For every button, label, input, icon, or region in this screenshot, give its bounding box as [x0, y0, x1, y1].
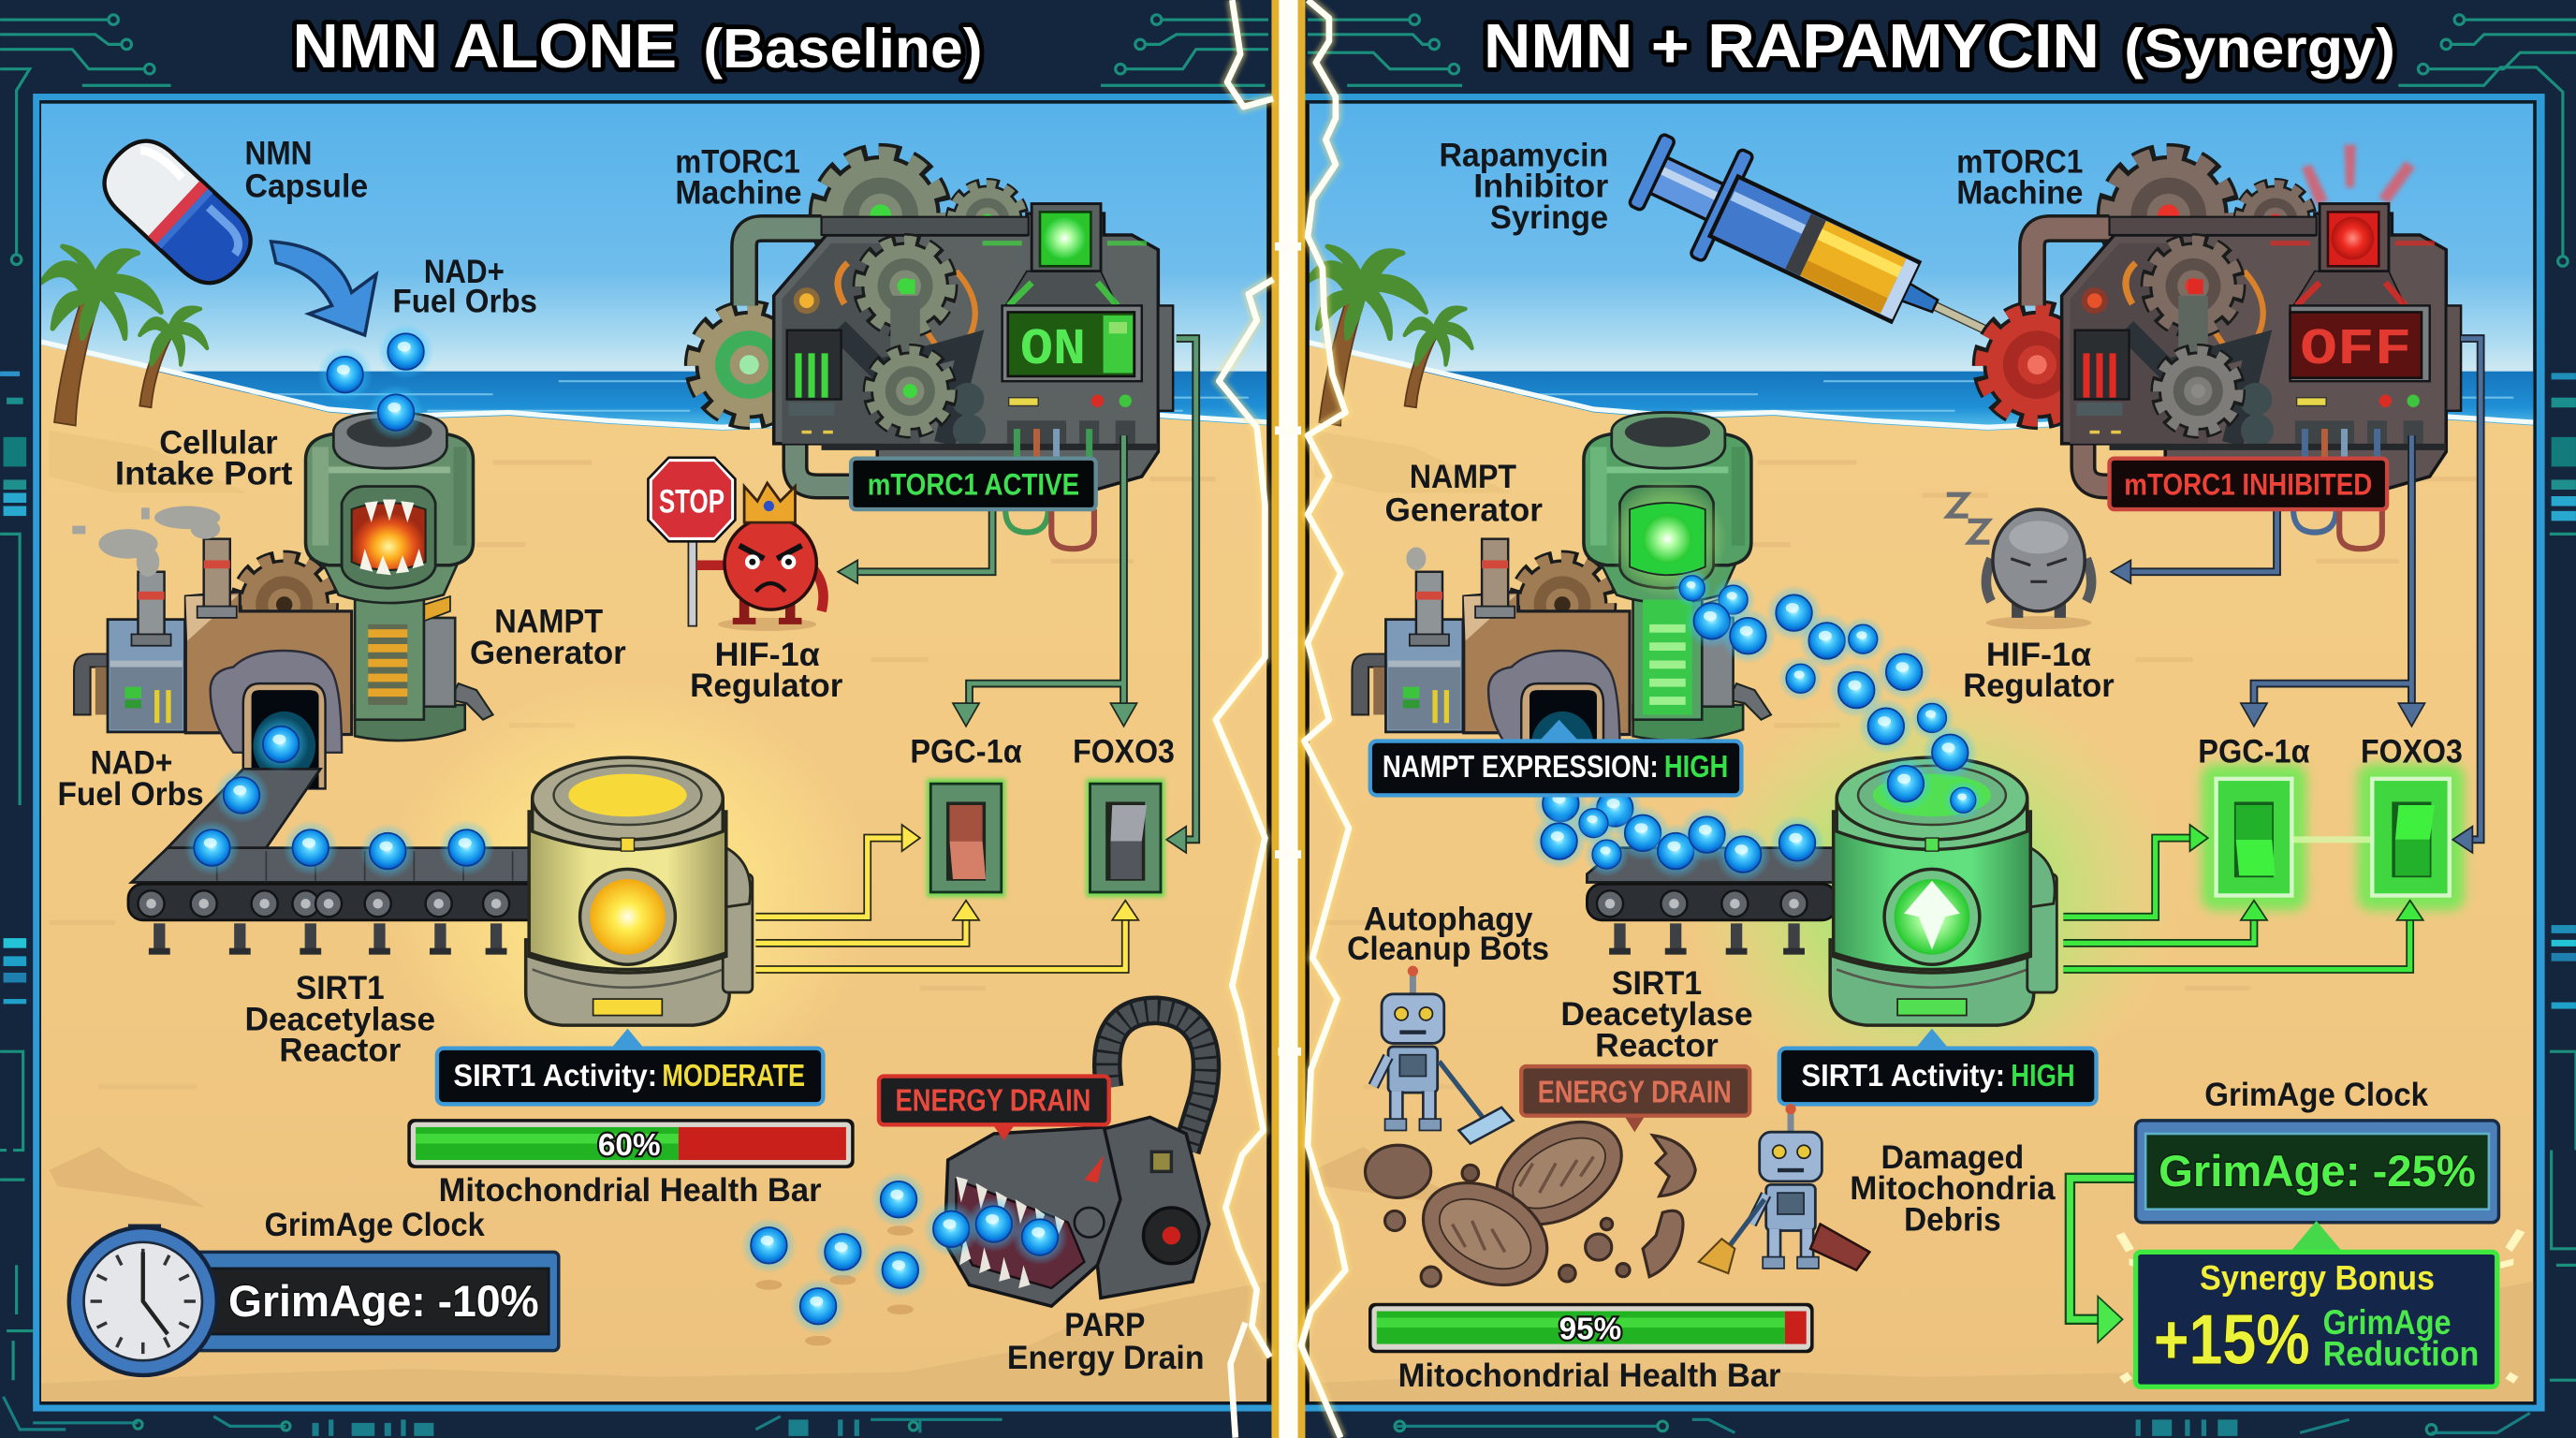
label: SIRT1 deacetylase reactor: Reactor [279, 1033, 402, 1069]
label: damaged mitochondria debris: Mitochondria [1850, 1170, 2056, 1207]
label: rapamycin inhibitor syringe: Rapamycin [1439, 137, 1608, 173]
label: PARP energy drain [1007, 1307, 1204, 1376]
label: NMN capsule: Capsule [245, 169, 368, 205]
panel: synergy bonus: Reduction [2323, 1334, 2479, 1372]
switch: PGC-1 alpha on [2217, 779, 2291, 895]
status tag: mTORC1 inhibited [2110, 459, 2387, 509]
label: PGC-1 alpha: PGC-1α [910, 733, 1022, 770]
pointer to status [1915, 1029, 1949, 1049]
sparkles [2116, 1229, 2525, 1384]
label: NAMPT generator [1385, 459, 1543, 528]
robot with broom [1699, 1104, 1869, 1273]
label: SIRT1 deacetylase reactor [1560, 965, 1753, 1064]
label: GrimAge clock: GrimAge Clock [265, 1207, 485, 1243]
title: NMN alone: NMN ALONE [292, 12, 677, 81]
GrimAge readout: -25%: GrimAge: -25% [2159, 1147, 2476, 1196]
icon: stop sign: STOP [659, 484, 724, 521]
mTORC1 machine: active [695, 154, 1173, 549]
arrows: inhibited signalling [2130, 339, 2481, 840]
label: HIF-1 alpha regulator: Regulator [1963, 668, 2115, 704]
robot with vacuum [1373, 966, 1513, 1143]
pointer to status [611, 1029, 644, 1049]
HIF-1 alpha regulator: angry [696, 483, 824, 631]
mTORC1 machine: inhibited [1983, 154, 2461, 549]
subtitle: synergy: (Synergy) [2124, 17, 2395, 80]
status light: green [1032, 204, 1101, 271]
icon: stop sign [648, 458, 735, 626]
label: NMN capsule: NMN [245, 136, 313, 172]
label: SIRT1 deacetylase reactor: Reactor [1595, 1027, 1719, 1064]
switch: PGC-1 alpha [927, 779, 1005, 897]
label: SIRT1 deacetylase reactor: Deacetylase [245, 1001, 435, 1037]
icon: NMN capsule [91, 127, 265, 297]
status tag: mTORC1 active [851, 459, 1096, 509]
label: HIF-1 alpha regulator [690, 637, 843, 704]
label: rapamycin inhibitor syringe [1439, 137, 1609, 236]
label: NAD+ fuel orbs: Fuel Orbs [393, 283, 537, 319]
panel: NMN + rapamycin [1305, 94, 2545, 1412]
label: HIF-1 alpha regulator: Regulator [690, 668, 843, 704]
arrows: mTORC1 signalling [855, 339, 1196, 840]
conveyor belt [128, 769, 546, 955]
switch: FOXO3 on [2372, 779, 2450, 895]
mitochondrial health bar: 60%: 60% [598, 1128, 661, 1163]
coil [368, 624, 407, 705]
tower glow core [1608, 479, 1727, 714]
center divider: lightning bar [1216, 0, 1349, 1438]
label: PARP energy drain: Energy Drain [1007, 1340, 1204, 1376]
label: SIRT1 deacetylase reactor: Deacetylase [1560, 996, 1753, 1033]
label: cellular intake port: Intake Port [115, 456, 293, 492]
status: SIRT1 activity moderate: MODERATE [662, 1059, 805, 1093]
pointer to NAMPT status [1540, 720, 1579, 741]
red warning rays [2302, 144, 2415, 205]
grey gear override [2159, 351, 2238, 431]
GrimAge readout: GrimAge: -10% [228, 1277, 539, 1327]
OFF display [2291, 312, 2422, 379]
energy drain tag [879, 1077, 1109, 1140]
label: NAMPT generator: Generator [470, 635, 626, 671]
reactor glow [381, 682, 874, 1109]
ON display [1008, 312, 1134, 379]
lightning glow [1216, 0, 1349, 1438]
label: mTORC1 machine: Machine [675, 175, 802, 212]
label: NAD+ fuel orbs: NAD+ [424, 254, 505, 290]
status: NAMPT expression high: HIGH [1664, 750, 1728, 785]
damaged mitochondria debris [1365, 1101, 1695, 1305]
smoke [1406, 547, 1426, 570]
OFF display: OFF [2300, 322, 2411, 379]
label: mTORC1 machine: mTORC1 [1956, 143, 2083, 180]
link between switches [2293, 836, 2372, 843]
HIF-1 alpha regulator: asleep [1986, 509, 2091, 629]
label: NMN capsule [245, 136, 368, 205]
status: NAMPT expression high: NAMPT EXPRESSION: [1383, 750, 1659, 785]
NAMPT factory [1352, 539, 1630, 788]
label: PGC-1 alpha: PGC-1α [2198, 733, 2310, 770]
status: SIRT1 activity high: HIGH [2011, 1059, 2075, 1093]
label: mTORC1 machine [675, 143, 802, 212]
status tag: mTORC1 active: mTORC1 ACTIVE [868, 467, 1079, 501]
status: SIRT1 activity high: SIRT1 Activity: [1801, 1059, 2005, 1093]
fuel orbs: falling [317, 324, 433, 440]
label: autophagy cleanup bots [1347, 901, 1549, 967]
label: mTORC1 machine: mTORC1 [675, 143, 800, 180]
title: NMN + rapamycin: NMN + RAPAMYCIN [1484, 12, 2100, 81]
label: PARP energy drain: PARP [1064, 1307, 1145, 1343]
energy drain tag: faded [1521, 1066, 1749, 1132]
status: SIRT1 activity moderate [437, 1049, 823, 1104]
label: NAMPT generator [470, 604, 626, 671]
NAMPT factory [74, 539, 352, 788]
GrimAge readout: -25% [2136, 1121, 2498, 1223]
cellular intake tower [305, 413, 493, 741]
pointer: up to GrimAge [2291, 1221, 2343, 1252]
fuel orbs: on conveyor [184, 716, 494, 879]
conveyor belt [1587, 848, 1837, 955]
green signal wires [2063, 825, 2423, 969]
status: SIRT1 activity moderate: SIRT1 Activity: [453, 1059, 657, 1093]
label: mTORC1 machine: Machine [1956, 175, 2083, 212]
needle impact [2001, 330, 2027, 357]
label: NAD+ fuel orbs lower: Fuel Orbs [57, 776, 204, 813]
yellow signal wires [755, 825, 1138, 969]
switch glow: FOXO3 [2358, 764, 2465, 910]
mitochondrial health bar: 60% [407, 1119, 855, 1168]
label: NAMPT generator: NAMPT [1410, 459, 1516, 495]
subtitle: baseline: (Baseline) [703, 17, 983, 80]
left panel frame [33, 94, 1271, 1412]
label: rapamycin inhibitor syringe: Inhibitor [1473, 169, 1609, 205]
label: HIF-1 alpha regulator: HIF-1α [714, 637, 820, 673]
panel: synergy bonus: GrimAge [2323, 1303, 2452, 1342]
switch glow: PGC-1 alpha [2202, 764, 2306, 910]
label: NAMPT generator: Generator [1385, 492, 1543, 528]
label: autophagy cleanup bots: Autophagy [1364, 901, 1533, 937]
status: SIRT1 activity high [1779, 1049, 2096, 1104]
energy drain tag: faded: ENERGY DRAIN [1538, 1076, 1732, 1110]
label: rapamycin inhibitor syringe: Syringe [1490, 199, 1608, 236]
label: autophagy cleanup bots: Cleanup Bots [1347, 931, 1549, 967]
fuel orbs: drained [741, 1171, 1068, 1345]
label: damaged mitochondria debris: Damaged [1881, 1139, 2024, 1176]
SIRT1 reactor: high [1830, 757, 2056, 1025]
ON display: ON [1020, 322, 1086, 379]
label: SIRT1 deacetylase reactor: SIRT1 [1612, 965, 1702, 1002]
lightning bolts [1216, 0, 1349, 1438]
energy drain tag: ENERGY DRAIN [896, 1083, 1090, 1118]
panel: synergy bonus: +15% [2154, 1300, 2310, 1379]
NAMPT tower: high expression [1584, 413, 1771, 741]
beach scene [1306, 104, 2533, 1401]
status tag: mTORC1 inhibited: mTORC1 INHIBITED [2124, 467, 2372, 501]
label: GrimAge clock: GrimAge Clock [2204, 1077, 2428, 1113]
side data bars [0, 372, 2576, 1436]
mitochondrial health bar: 95%: 95% [1559, 1312, 1621, 1346]
status: NAMPT expression high [1370, 741, 1741, 795]
mitochondrial health bar: 95% [1368, 1303, 1814, 1353]
label: SIRT1 deacetylase reactor [245, 970, 435, 1069]
PARP energy-drain monster [944, 1010, 1209, 1306]
SIRT1 reactor: moderate [526, 757, 753, 1025]
right panel frame [1305, 94, 2545, 1412]
panel: NMN alone [33, 94, 1271, 1412]
label: FOXO3: FOXO3 [2361, 733, 2463, 770]
switch: FOXO3 [1086, 779, 1164, 897]
label: NAD+ fuel orbs [393, 254, 537, 319]
GrimAge readout [181, 1252, 559, 1351]
beach scene [41, 104, 1268, 1401]
label: HIF-1 alpha regulator [1963, 637, 2115, 704]
label: NAD+ fuel orbs lower: NAD+ [91, 745, 172, 782]
icon: rapamycin syringe [1620, 115, 2043, 399]
label: HIF-1 alpha regulator: HIF-1α [1986, 637, 2092, 673]
label: NAMPT generator: NAMPT [494, 604, 604, 640]
panel: synergy bonus [2136, 1252, 2497, 1387]
label: mitochondrial health bar: Mitochondrial Health Bar [439, 1172, 822, 1209]
icon: sleeping Z [1947, 494, 1989, 542]
label: mitochondrial health bar: Mitochondrial Health Bar [1398, 1357, 1781, 1394]
label: NAD+ fuel orbs lower [57, 745, 204, 813]
label: FOXO3: FOXO3 [1073, 733, 1175, 770]
reactor glow [1686, 682, 2178, 1109]
fuel orbs: abundant flow [1531, 568, 1983, 882]
arrow: GrimAge to synergy bonus [2070, 1178, 2136, 1343]
icon: clock [69, 1224, 217, 1375]
label: damaged mitochondria debris [1850, 1139, 2056, 1239]
label: mTORC1 machine [1956, 143, 2083, 212]
status light: red [2320, 204, 2389, 271]
label: cellular intake port [115, 424, 293, 492]
label: damaged mitochondria debris: Debris [1904, 1202, 2001, 1239]
label: SIRT1 deacetylase reactor: SIRT1 [296, 970, 385, 1006]
panel: synergy bonus: Synergy Bonus [2200, 1259, 2435, 1298]
arrow: capsule to orbs [271, 242, 376, 335]
smoke [72, 506, 220, 577]
label: cellular intake port: Cellular [159, 424, 278, 461]
furnace mouth [352, 500, 426, 575]
